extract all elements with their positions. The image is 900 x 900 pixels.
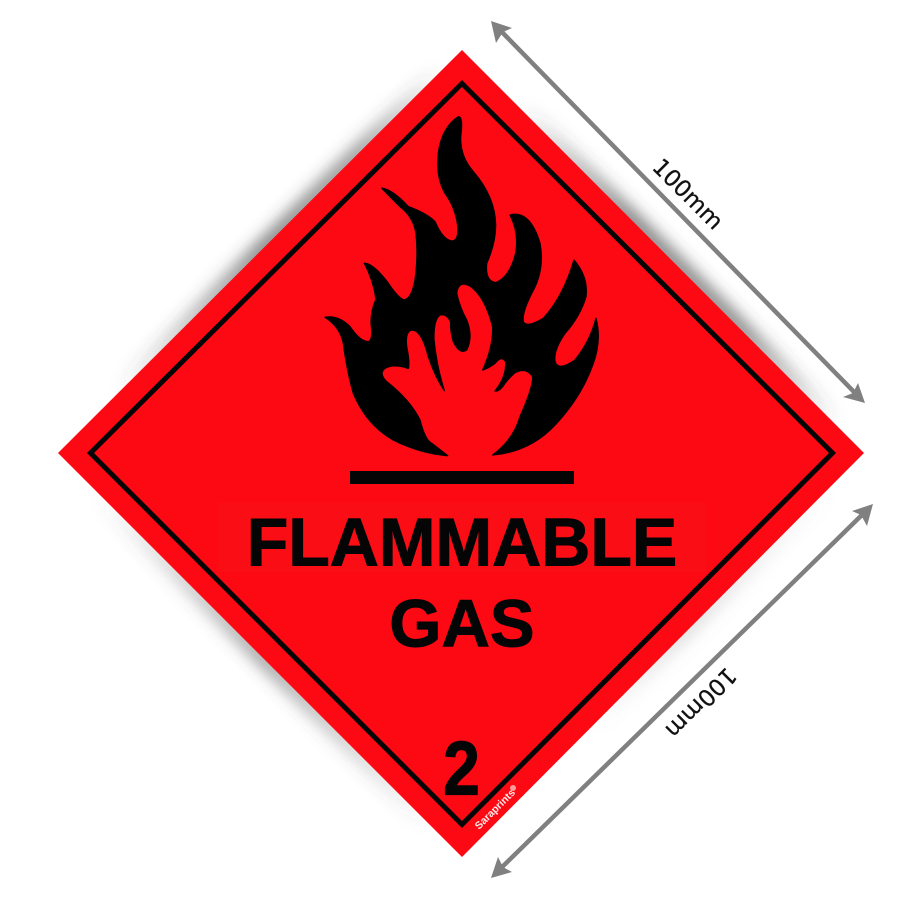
class number: 2 [443, 727, 480, 812]
heading: gas: GAS [389, 586, 535, 662]
black inner border [90, 84, 832, 824]
faint panel behind heading [218, 503, 706, 572]
heading: flammable: FLAMMABLE [247, 504, 677, 580]
registered mark [510, 785, 516, 791]
arrow: lower right dimension [491, 504, 873, 878]
dimension label: upper right: 100mm [647, 154, 728, 235]
drop shadow behind diamond [100, 72, 835, 825]
dimension label: lower right: 100mm [660, 662, 741, 743]
bar under flame [350, 471, 574, 484]
brand mark: Saraprints [473, 787, 518, 832]
arrow: upper right dimension [491, 21, 865, 403]
icon: flame [325, 117, 598, 456]
